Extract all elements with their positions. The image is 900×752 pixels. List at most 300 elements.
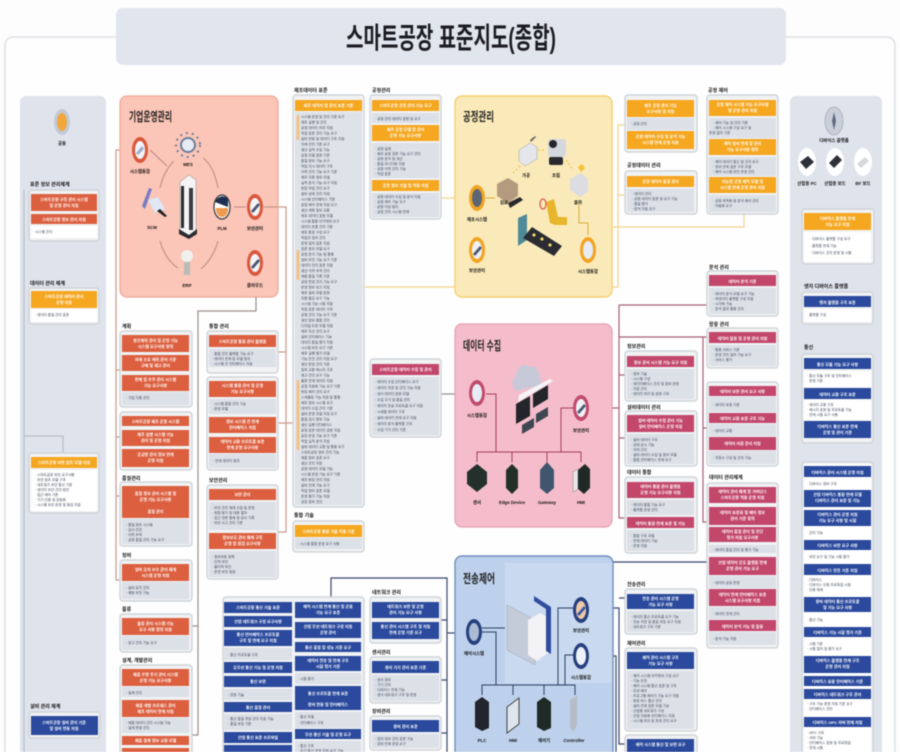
card: integration B: 시스템 통합 관리 및 운영 <box>222 382 263 388</box>
card: right panel sensors: 데이터 교환 구조 표준 <box>819 391 856 397</box>
card: right upper B <box>625 162 697 214</box>
card: design and development: 설계, 개발관리 <box>122 657 153 664</box>
panel: right support column: 산업용 보드 <box>824 180 846 186</box>
card: pink right long: 산업 데이터 공유 플랫폼 연계 <box>718 559 767 565</box>
card: right panel long list: · 디바이스 정보 구조 <box>807 481 838 486</box>
badge: software: 보안관리 <box>469 267 485 274</box>
card: small standard below list: 통합 기술 <box>294 512 314 519</box>
card: blue center 3: 제어 시스템 통신 및 보안 요구 <box>636 741 686 747</box>
card: pink right long: 데이터 품질 관리 및 진단 <box>722 528 763 534</box>
card: right panel long list: · 서버 기능 <box>807 735 824 740</box>
card: pink right long: 관리 기준 정의 <box>730 515 755 521</box>
card: pink center 2 <box>625 404 697 466</box>
card: pink center 2: · 상태 감시 기능 <box>631 442 655 447</box>
icon: device switch: Controller <box>564 738 585 743</box>
card: process middle column: · 공정 데이터 수집 및 분석 지침 <box>375 194 421 199</box>
card: quality <box>120 475 192 546</box>
card: blue center 2: · 설비 연계 표준 모델 기능 <box>631 703 670 708</box>
right stack: 데이터 전송 및 연계 구조 <box>307 657 349 663</box>
standards text list: 작업 실적 분석 지침 <box>301 438 330 444</box>
badge: equipment <box>467 185 487 223</box>
card: right upper C: 시스템 연계 운영 관리 지침 <box>720 184 765 190</box>
card: right panel long list: · 통신 기능 <box>807 617 824 622</box>
standards text list: 설비 운영 모델 지침 요구 <box>301 411 338 416</box>
card: design and development <box>120 657 192 752</box>
card: pink center 3: · 데이터 통합 기능 요구 <box>631 502 666 507</box>
card: process middle column: 공정관리 <box>372 87 391 94</box>
standards text list: 품질 정보 기능 요구 <box>301 158 330 163</box>
card: network: 네트워크 보안 및 운영 <box>387 603 424 609</box>
card: integration B <box>207 377 278 470</box>
card: security management: · 보안 사고 관리 기준 <box>212 520 244 525</box>
card: left column group 2: 운영 지침 <box>56 299 72 305</box>
card: pink center 1: · 저장 관리 <box>631 386 647 391</box>
icon: box machine: 원료 <box>500 199 508 205</box>
connector: left column trunk <box>24 190 63 752</box>
card: security management: · 인적 보안 <box>212 559 229 564</box>
standards text list: 제조 정보 시스템 요구 <box>301 400 334 405</box>
card: right panel long list: · 인터페이스 표현 및 프로파일 <box>807 740 851 745</box>
heading: transport control: 전송제어 <box>463 571 495 586</box>
card: sensors: · 기기 관리 <box>375 682 391 687</box>
connector: enterprise panel to lower-left cards <box>116 150 130 580</box>
card: right panel long list: 디바이스 인증 기준 지침 <box>817 567 858 573</box>
card: quality: 운영 기능 요구사항 <box>140 496 172 502</box>
card: blue center 1: 기능 요구 사항 <box>648 601 673 607</box>
card: pink center 2: · 통합 인터페이스 연계 요구 <box>631 457 672 462</box>
card: pink right long: 데이터 관리체계 <box>709 474 743 481</box>
card: pink right long: 데이터 관리 체계 및 거버넌스 <box>718 488 767 494</box>
card: right upper C: 운영 절차 기준 <box>709 130 731 135</box>
card: quality: · 공정 품질 관리 기능 요구 <box>126 537 165 542</box>
icon: gear network: MES <box>183 162 193 167</box>
card: security management: 정보보호 관리 체계 구축 <box>222 534 263 540</box>
card: left column group 4: 설비 관리 체계 <box>30 703 61 710</box>
badge: integration: 시스템통합 <box>578 268 598 274</box>
icon: inspection machine <box>519 136 537 179</box>
card: right panel long list: · 보안 요구 및 기능 시험 평가 <box>807 554 850 559</box>
card: pink right top: · 빅데이터 플랫폼 구성 지침 <box>713 296 753 301</box>
card: left column group 1: 표준 정보 관리체계 <box>30 181 70 188</box>
card: right upper B: 공정데이터 관리 <box>627 162 661 169</box>
card: blue center 1 <box>625 581 697 634</box>
card: data collection side: · 센서 데이터 표현 모델 <box>375 391 409 396</box>
card: pink right long <box>707 474 778 648</box>
standards text list: 데이터 관리 표준 지침 <box>301 262 333 268</box>
standards text list: 표준 참조 모델 요구 <box>301 246 330 251</box>
card: process standards list: 제조 데이터 및 관리 표준 기준 <box>304 102 354 108</box>
standards text list: 생산 실행 인터페이스 <box>301 422 333 427</box>
standards text list: 제품 품질 기록 기준 <box>301 274 330 278</box>
card: blue center 2 <box>625 640 697 731</box>
card: left column group 3 <box>29 453 99 513</box>
card: quality: · 이력 추적 <box>126 532 142 537</box>
left stack: 유무선 통신 기능 및 운영 지침 <box>233 664 283 670</box>
card: right panel long list: · 관리 기능 <box>807 530 824 535</box>
card: design and development: · 설계 관리 <box>126 690 142 695</box>
right stack: 기능 요구 표준 <box>316 609 340 615</box>
standards text list: 생산 관리 지침 <box>301 460 322 466</box>
left stack: · 암호 기술 <box>228 692 245 697</box>
card: right upper B: 공정 데이터 품질 관리 <box>642 178 679 184</box>
card: left column group 1: 및 운영 관리 지침 <box>49 202 79 208</box>
standards text list: 생산 이력 추적 관리 <box>301 268 330 273</box>
left stack: · 통신 품질 측정 관리 지표 기능 <box>228 716 274 721</box>
card: design and development: 제품 설계 정보 교환 모델 <box>135 737 176 743</box>
card: right upper C: · 장비 연계 표준 구조 모델 <box>713 164 751 169</box>
card: pink right top: · 데이터 분석 모델 요구 기능 <box>713 291 755 296</box>
card: pink right 2 <box>707 321 778 368</box>
card: right panel long list: 장비 데이터 통신 프로토콜 <box>816 598 860 604</box>
card: right panel long list: 디바이스 네트워크 구조 관리 <box>814 691 862 697</box>
card: right upper C <box>707 87 778 214</box>
card: network: 관리 기능 요구 사항 <box>389 609 422 615</box>
right stack: 무선 통신 기술 및 운영 요구 <box>305 731 351 737</box>
standards text list: 시스템 운영 기능 요구 기준 <box>301 472 341 476</box>
right stack: · 시험 평가 <box>298 676 315 681</box>
card: right upper A: 공정 데이터 수집 및 분석 기능 <box>636 133 686 139</box>
left stack: · 품질 보장 기준 <box>228 721 252 726</box>
card: blue center 1: 전송 관리 시스템 운영 <box>642 595 679 601</box>
card: process middle column: · 작업 표준 <box>375 171 392 176</box>
card: integration A: · 데이터 연계 및 모델 정의 <box>212 356 250 361</box>
card: blue center 2: · 산업용 네트워크 구성 <box>631 708 664 713</box>
card: pink center 2: 설비 인터페이스 운영 지침 <box>639 423 683 429</box>
card: plan group B <box>120 412 192 470</box>
card: plan group A: 생산계획 관리 및 운영 기능 <box>133 337 178 343</box>
card: right panel yellow: 디바이스 플랫폼 연계 <box>820 215 855 221</box>
card: left column group 4 <box>29 703 100 738</box>
icon: bulb: ERP <box>182 283 192 288</box>
card: maintenance: · 설비 유지 관리 <box>126 585 149 590</box>
card: process middle column: 공정 정보 기술 및 적용 지침 <box>382 182 429 188</box>
icon: dial: PLM <box>217 226 227 231</box>
card: right panel long list: · 구조 기능 운영 지침 기준 요구 <box>807 701 853 706</box>
card: plan group A: 기능 요구사항 <box>144 382 167 388</box>
standards text list: 시스템 운영 및 관리 기준 요구 <box>301 114 345 119</box>
badge: software <box>469 237 485 274</box>
standards text list: 작업 지시 데이터 구조 <box>301 164 334 168</box>
card: left column group 1: 스마트공장 구축 관리 시스템 <box>40 196 88 202</box>
card: data collection side: · 데이터 저장 및 관리 기능 지침 <box>375 385 421 390</box>
standards text list: 자원 할당 요구 기능 <box>301 296 330 300</box>
icon: satellite <box>142 188 167 230</box>
card: process middle column: · 제조 공정 표준 기능 요구 관리 <box>375 151 421 156</box>
badge: security <box>130 137 150 174</box>
card: right panel long list: 디바이스 기능 시험 평가 기준 <box>813 629 862 635</box>
card: sensors: · 디바이스 연계 기능 <box>375 687 406 692</box>
left stack: · 통신 프로토콜 구조 <box>228 652 259 657</box>
card: process middle column: · 공정 설계 <box>375 146 391 151</box>
inner connectors <box>477 394 589 462</box>
card: pink right 3: · 데이터 교환 <box>713 428 733 433</box>
card: right upper C: 공정 제어 시스템 기능 요구사항 <box>716 101 769 107</box>
card: right panel long list: · 인증 체계 <box>807 587 823 592</box>
left stack: 통신 보안 <box>250 678 266 684</box>
card: plan group A: 계획 <box>122 323 132 330</box>
card: design and development: 제품 수명 주기 관리 시스템 <box>133 671 178 677</box>
card: network: 네트워크 관리 <box>372 589 401 596</box>
panel: left support column <box>20 96 106 752</box>
card: quality: 품질 관리 <box>148 508 164 514</box>
card: left column group 1: 스마트공장 정보 관리 지침 <box>42 216 86 222</box>
standards text list: 디지털 트윈 모델 지침 <box>301 323 333 328</box>
list background <box>295 112 362 505</box>
icon: robot cell: 조립 <box>552 172 560 178</box>
card: network: 연계 운영 기준 요구 <box>389 629 422 635</box>
card: pink right 3: 데이터 교환 표준 구조 기능 <box>720 415 765 421</box>
card: integration A: · 통합 관리 플랫폼 기능 요구 <box>212 351 254 356</box>
icon: robot cell <box>548 139 566 178</box>
card: security management: 보안 관리 <box>235 491 251 497</box>
card: right panel sensors: 디바이스 통신 표준 연계 <box>817 423 858 429</box>
icon: device 1 <box>467 464 487 506</box>
card: pink right 3: 데이터 저장 관리 지침 <box>724 440 761 446</box>
card: pink center 2: · 설비 데이터 수집 및 정보 모델 <box>631 452 677 457</box>
card: right panel long list: · OPC 구조 <box>807 731 825 735</box>
card: right upper C: · 제어 시스템 보안 운영 관리 <box>713 169 754 174</box>
card: sensors: 센서 기기 관리 표준 기준 <box>385 664 426 670</box>
card: blue center 2: · 산업 자동화 인터페이스 지침 <box>631 713 675 718</box>
card: left column group 1: · 시스템 관리 <box>33 229 52 234</box>
card: right panel long list: 디바이스 플랫폼 연계 구조 <box>816 657 860 663</box>
card: left column group 3: · 네트워크 보안 통신 기준 <box>35 482 73 487</box>
card: pink center 3: · 연계 데이터 기능 <box>631 538 658 543</box>
card: pink right 3 <box>707 382 778 466</box>
icon: device PLC: PLC <box>478 738 487 743</box>
card: right panel sensors: 통신 모듈 기능 요구 사항 <box>817 361 858 367</box>
card: logistics <box>120 606 192 652</box>
standards text list: 제조 데이터 표현 모델 <box>301 213 333 218</box>
right stack: · 통신 구조 <box>298 743 315 748</box>
card: right panel platform: 엣지 디바이스 플랫폼 <box>804 283 849 290</box>
card: right upper B: · 품질 평가 <box>632 201 649 206</box>
card: pink center 1: · 시스템 구성 <box>631 376 650 381</box>
card: pink center 3 <box>625 469 697 553</box>
badge: cloud <box>247 250 263 289</box>
card: small standard below list: · 시스템 통합 운영 요구 사항 <box>298 541 340 546</box>
card: data collection side: · 설비 데이터 연계 요구 지침 <box>375 415 416 420</box>
standards text list: 데이터 흐름 관리 기준 <box>301 224 334 229</box>
badge: software <box>573 395 589 434</box>
badge: network: 제어시스템 <box>464 650 484 657</box>
card: pink right 2: · 운영 관리 절차 기능 요구 <box>713 352 752 357</box>
card: small standard below list: 스마트공장 통합 기술 적용 기준 <box>302 528 355 534</box>
card: left column group 2: 스마트공장 데이터 관리 <box>44 293 84 299</box>
icon: device 4 <box>573 464 590 505</box>
standards text list: 이력 관리 기능 요구 기준 <box>301 169 338 174</box>
card: blue center 2: · 현장 버스 통신 관리 <box>631 698 662 703</box>
card: pink right 2: 데이터 활용 및 운영 관리 지침 <box>718 335 768 341</box>
card: pink right long: · 데이터 공유 운영 <box>713 580 740 585</box>
card: right panel sensors: · 연계 시험 요구 사항 <box>807 412 839 417</box>
card: right panel sensors: · 메시지 표현 및 프로토콜 기능 <box>807 407 852 412</box>
card: pink center 1: 정보 관리 시스템 기능 요구 지침 <box>634 359 688 365</box>
standards text list: 설비 연동 및 데이터 구조 지침 <box>301 136 345 141</box>
standards text list: 데이터 수집 관리 기준 <box>301 406 334 410</box>
card: design and development: 제품 개발 프로세스 관리 <box>135 702 176 708</box>
card: right upper C: · 공정 최적화 및 분석 제어 관리 <box>713 198 759 203</box>
left stack <box>224 602 292 752</box>
card: security management: · 위험 평가 및 대응 절차 <box>212 510 248 515</box>
card: maintenance <box>120 552 192 601</box>
panel: right support column: BF 보드 <box>855 181 871 186</box>
card: pink right 3: 데이터 보안 관리 요구 사항 <box>720 388 765 394</box>
right stack: 운영 관리 <box>320 629 336 635</box>
card: pink center 3: 데이터 통합 <box>627 469 652 476</box>
heading: data collection: 데이터 수집 <box>463 339 501 353</box>
card: right panel sensors <box>802 344 873 443</box>
card: plan group A <box>120 323 192 407</box>
card: plan group B: 관리 및 운영 지침 <box>141 437 170 443</box>
card: pink right top: 분석 관리 <box>709 264 729 271</box>
card: logistics: 요구 사항 정의 지침 <box>139 626 172 632</box>
card: pink right 2: · 서비스 평가 <box>713 357 733 362</box>
card: pink center 1: 정보관리 <box>627 343 646 350</box>
right stack: 시험 평가 기준 <box>316 663 340 669</box>
card: pink right long: · 데이터 품질 관리 및 평가 기능 <box>713 547 759 552</box>
card: pink right long: · 데이터 연계 관리 <box>713 611 740 616</box>
card: equipment: · 장비 연계 운영 요구 <box>375 741 407 746</box>
card: blue center 1: · 전송 지연 및 품질 보장 요구 지침 <box>631 619 681 624</box>
card: pink center 1: · 데이터베이스 관리 및 정보 운영 <box>631 381 679 386</box>
card: equipment <box>370 708 441 750</box>
card: process middle column: · 공정 이상 탐지 <box>375 204 398 209</box>
card: right panel sensors: · 운영 기준 <box>807 378 824 383</box>
standards text list: 공정 자동화 기능 요구 기준 <box>301 384 341 388</box>
card: plan group B: 스마트공장 제조 운영 시스템 <box>132 418 180 424</box>
card: left column group 1 <box>29 181 99 241</box>
card: right panel platform: 엣지 플랫폼 구조 표준 <box>819 299 856 305</box>
standards text list: 제조 자산 관리 요구 <box>301 328 330 334</box>
standards text list: 자재 관리 기준 요구 <box>301 142 330 146</box>
card: pink right long: 데이터 표준화 및 메타 정보 <box>720 509 765 515</box>
card: left column group 3: · 스마트공장 보안 요구사항 <box>35 472 75 477</box>
card: pink right long: 시스템 요구사항 지침 <box>725 597 760 603</box>
card: right panel yellow: · 디바이스 관리 운영 및 시험 <box>810 250 851 255</box>
card: right upper A: · 공정 관리 <box>631 121 647 126</box>
card: plan group B: 제조 실행 시스템 기능 <box>137 431 174 437</box>
card: plan group A: · 기업 자원 관리 <box>126 395 149 400</box>
right stack: 산업 무선 네트워크 구성 지침 <box>304 623 353 629</box>
card: data collection side: · 수집 주기 및 품질 관리 <box>375 397 410 402</box>
card: logistics: 물류 <box>122 606 132 613</box>
card: blue cluster <box>223 597 364 752</box>
standards text list: 기능 안전 관리 지침 요구 <box>301 356 338 361</box>
standards text list: 제조 실행 및 관리 <box>301 120 326 124</box>
card: security management: · 정보보호 정책 <box>212 554 234 559</box>
card: blue center 2: · 기능 안전 <box>631 678 647 683</box>
icon: device 3: Gateway <box>538 500 557 505</box>
card: logistics: 물류 관리 시스템 기능 <box>137 620 174 626</box>
card: design and development: 제조 데이터 연계 지침 <box>137 708 174 714</box>
standards text list: 설비 데이터 교환 및 활용 요구 <box>301 444 345 449</box>
heading: enterprise operations: 기업운영관리 <box>129 109 172 124</box>
card: integration A: · 시스템 간 인터페이스 지침 <box>212 361 252 366</box>
standards text list: 현장 작업 관리 요구 <box>301 186 330 190</box>
title bar <box>116 8 786 65</box>
card: blue center 2: · 제어 시스템 통신 표준 및 구조 <box>631 683 677 688</box>
card: right upper A: 제조 공정 관리 기능 <box>644 102 677 108</box>
badge: software: 보안관리 <box>573 627 589 634</box>
card: plan group A: 판매 및 수주 관리 시스템 <box>135 376 176 382</box>
card: design and development: · 설계 변경 관리 <box>126 725 149 730</box>
card: right panel long list: 디바이스 관리 운영 지침 <box>817 511 858 517</box>
card: security management: · 접근 권한 통제 및 감사 기록 <box>212 515 255 520</box>
card: pink center 3: · 플랫폼 운영 관리 <box>631 507 658 512</box>
standards text list: 시스템 인터페이스 기준 <box>301 196 336 202</box>
card: pink center 3: 데이터 통합 연계 표준 및 기능 <box>636 520 686 526</box>
card: process middle column: · 공정 분석 및 개선 <box>375 156 403 161</box>
card: data collection side: · 데이터 분석 플랫폼 구조 <box>375 421 413 426</box>
card: right panel long list: · 인터페이스 관리 <box>807 706 833 711</box>
card: integration B: 데이터 교환 프로토콜 표준 <box>221 438 265 444</box>
standards text list: 제조 실행 평가 모델 <box>301 350 330 356</box>
card: right upper C: 제어 설비 연계 및 관리 <box>724 140 762 146</box>
card: security management: 보안관리 <box>209 477 228 484</box>
standards text list: 생산 실적 수집 기능 <box>301 147 330 152</box>
standards text list: 실적 분석 기능 요구 지침 <box>301 180 337 185</box>
standards text list: 시스템 보안 요구 기준 <box>301 345 334 350</box>
left stack: 산업 네트워크 구성 요구사항 <box>234 618 282 624</box>
badge: integration: 시스템통합 <box>467 412 487 418</box>
card: left column group 3: · 보안 참조 모델 구조 <box>35 477 67 482</box>
standards text list: 생산 운영 관리 기준 <box>301 362 330 366</box>
card: blue center 2: 제어 관리 시스템 구조 <box>642 654 679 660</box>
standards text list: 시스템 통합 아키텍처 요구 <box>301 218 340 224</box>
card: left column group 3: · 접근 제어 기준 <box>35 492 59 497</box>
inner highlight <box>505 563 612 683</box>
card: process middle column: 제조 공정 모델 및 관리 <box>387 126 425 132</box>
card: right panel yellow: 기능 요구 지침 <box>825 221 850 227</box>
standards text list: 공정 관리 기능 요구 기준 <box>301 312 338 317</box>
badge: equipment: 제조시스템 <box>467 216 487 223</box>
card: left column group 2: · 데이터 품질 관리 표준 <box>35 312 70 317</box>
badge: integration <box>467 380 487 418</box>
card: left column group 2 <box>29 280 99 324</box>
card: process middle column: 운영 기능 요구사항 <box>390 132 422 138</box>
card: integration B: · 시스템 통합 관리 기능 <box>212 401 247 406</box>
card: plan group B: 운영 지침 <box>148 457 164 463</box>
card: right panel long list: 및 기능 요구 사항 <box>823 604 852 610</box>
card: pink right top: · 시각화 기능 <box>713 301 733 306</box>
standards text list: 작업 정보 표준 모델 <box>301 488 330 493</box>
standards text list: 스케줄링 기능 지침 및 활용 <box>301 394 341 400</box>
right stack: 장비 연동 및 인터페이스 <box>308 701 348 707</box>
card: pink center 2: · 이력 관리 <box>631 447 647 452</box>
standards text list: 설비 연계 기능 요구 <box>301 482 330 488</box>
panel: right support column: 산업용 PC <box>797 180 818 186</box>
panel: left support column: 공통 <box>58 140 66 146</box>
left stack: 산업 통신 표준 프로파일 <box>238 734 278 740</box>
connector: data card link <box>441 393 469 395</box>
card: blue center 2: 제어관리 <box>627 640 646 647</box>
card: quality: 품질관리 <box>122 475 141 482</box>
card: logistics: · 창고 관리 기능 요구 <box>126 640 158 645</box>
card: sensors: · 센서 정보 <box>375 677 392 682</box>
standards text list: 설비 상태 관리 지침 <box>301 191 330 196</box>
icon: satellite: SCM <box>147 225 157 230</box>
inner connectors <box>482 608 582 695</box>
card: plan group B: 공급망 관리 정보 연계 <box>137 451 174 457</box>
icon: device HMI: HMI <box>509 738 517 743</box>
card: right upper C: · 제어 데이터 통신 및 관리 요구 <box>713 159 759 164</box>
card: right upper B: · 분석 지침 요구 <box>632 206 656 211</box>
card: right upper C: · 제어 시스템 구성 요구 및 <box>713 125 751 130</box>
card: blue center 1: 전송관리 <box>627 581 646 588</box>
right stack: 통신 프로토콜 연계 표준 <box>308 690 348 696</box>
card: data collection side: 스마트공장 데이터 수집 및 관리 <box>379 366 432 372</box>
